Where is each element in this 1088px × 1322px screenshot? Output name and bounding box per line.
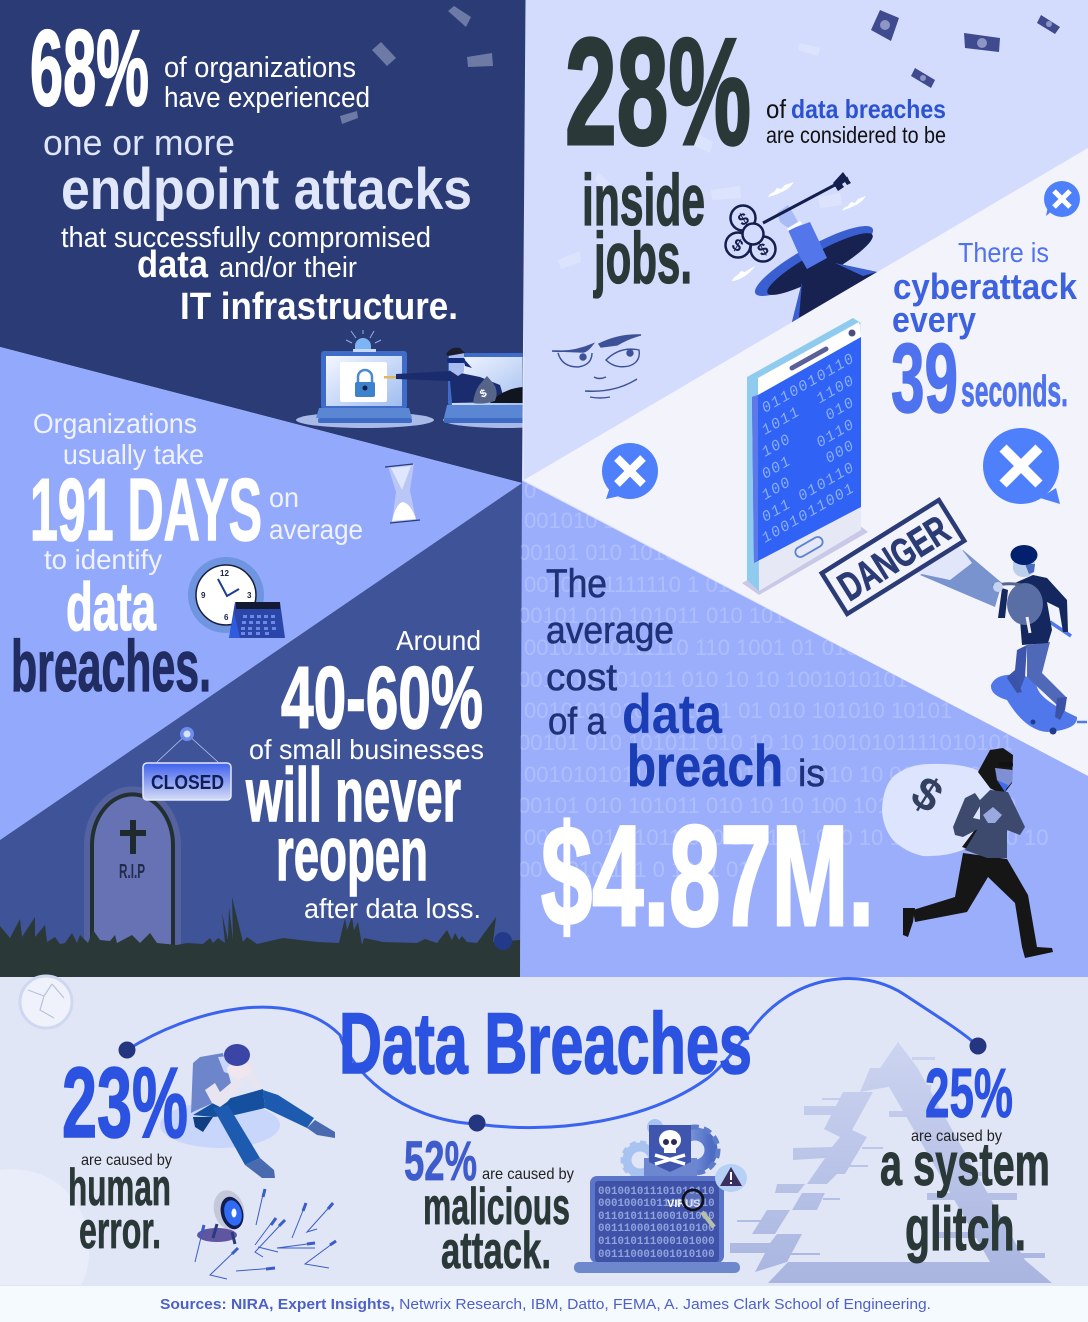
- panel: small businesses background: [0, 483, 522, 977]
- connector curve: [127, 978, 978, 1127]
- binary background pattern: 00101 010 1011 010 1001 01 010 10 10 10 10 010 10: [524, 825, 1048, 850]
- icon: virus laptop: 001110001001010100: [598, 1249, 715, 1261]
- icon: calendar: [229, 602, 285, 638]
- heading: attack: attack.: [441, 1222, 551, 1280]
- icon: virus laptop: 001001011101010110: [598, 1186, 715, 1198]
- binary background pattern: 001010101101 1001 01 010 1010 10 010 10101: [524, 762, 993, 787]
- footer: sources: Sources: NIRA, Expert Insights, Netwrix Research, IBM, Datto, FEMA, A. James Clark School of Engineering.: [160, 1296, 931, 1313]
- panel: top right background: [524, 0, 1088, 480]
- heading: data: data: [66, 569, 157, 645]
- stat: 52%: 52%: [404, 1129, 477, 1192]
- text: of organizations: of organizations: [164, 52, 356, 84]
- heading: error: error.: [79, 1202, 161, 1260]
- text: The: The: [546, 562, 607, 606]
- panel: average cost of a breach: [518, 478, 1053, 958]
- heading: Data Breaches: Data Breaches: [339, 996, 752, 1092]
- stat: $4.87M: $4.87M.: [541, 797, 874, 956]
- binary background pattern: 00101 010 101011 010 101 1010 10: [518, 603, 871, 628]
- heading: reopen: reopen: [276, 812, 428, 897]
- icon: hourglass: [385, 464, 420, 523]
- icon: target and arrows: [195, 1187, 336, 1279]
- text: one or more: one or more: [43, 122, 235, 163]
- icon: closed sign: [143, 727, 231, 800]
- icon: falling bills: [340, 6, 493, 124]
- icon: smartphone with binary: 1001011001: [759, 480, 858, 547]
- decorative: pale sphere: [0, 1169, 89, 1285]
- panel: causes of data breaches: [0, 976, 1052, 1285]
- icon: running thief with money bag: $: [903, 765, 952, 823]
- icon: thief on skateboard: [991, 545, 1087, 734]
- text: average: average: [269, 514, 363, 545]
- panel: small businesses: [0, 625, 520, 977]
- dot: [118, 1042, 136, 1058]
- stat: 39: 39: [891, 323, 958, 433]
- text: are caused by: are caused by: [81, 1152, 172, 1169]
- text: are caused by: are caused by: [482, 1166, 574, 1183]
- text: are considered to be: are considered to be: [766, 122, 946, 148]
- binary background pattern: [518, 478, 1048, 882]
- stat: 40-60%: 40-60%: [281, 648, 483, 747]
- icon: gravestone: R.I.P: [119, 861, 145, 883]
- icon: laptops with thief: $: [478, 387, 489, 401]
- icon: key in hole: [726, 172, 880, 322]
- icon: smartphone with binary: 011 010110: [759, 459, 858, 526]
- binary background pattern: 001 010 101011 010 10 10 1001010101: [518, 667, 908, 692]
- icon: key in hole: $: [754, 239, 772, 260]
- binary background pattern: 0010101010 10 1001 01 010 101010 10101: [524, 698, 952, 723]
- binary background pattern: 00101 010 101011 010 10 10 10010101111010101: [518, 730, 1013, 755]
- icon: closed sign: CLOSED: [151, 772, 224, 794]
- text: on: on: [269, 482, 299, 513]
- text: to identify: to identify: [44, 544, 162, 575]
- binary background pattern: 00101 010 101011 010 10 10: [518, 540, 804, 565]
- icon: skater thief beam: [917, 543, 1002, 607]
- icon: key in hole: $: [729, 235, 747, 256]
- icon: danger stamp: DANGER: [831, 508, 958, 610]
- icon: x bubble right: [983, 428, 1060, 504]
- icon: virus laptop: VIRUS: [667, 1198, 701, 1210]
- text: cost: cost: [546, 657, 617, 699]
- decorative: cracked sphere: [20, 976, 72, 1028]
- icon: sad person: [160, 1044, 335, 1178]
- icon: running thief with money bag: [882, 748, 1053, 958]
- icon: danger stamp: [822, 500, 964, 614]
- text: IT infrastructure: IT infrastructure.: [180, 286, 458, 328]
- panel: off-white diagonal background: [524, 148, 1088, 776]
- icon: clouds: [732, 182, 866, 281]
- text: have experienced: have experienced: [164, 82, 370, 114]
- icon: clock: 9: [201, 591, 206, 600]
- icon: blue dot: [494, 932, 512, 950]
- text: average: average: [546, 610, 674, 652]
- heading: endpoint attacks: endpoint attacks: [61, 157, 472, 222]
- panel: bottom causes background: [0, 977, 1088, 1286]
- heading: inside: inside: [582, 161, 705, 241]
- panel: inside jobs: [552, 7, 1060, 398]
- ground and grass: [0, 897, 520, 977]
- panel: endpoint attacks: [30, 6, 567, 428]
- heading: jobs: jobs.: [593, 219, 692, 299]
- dot: [970, 1038, 986, 1054]
- panel: sources footer background: [0, 1286, 1088, 1322]
- panel: lower right background: [520, 480, 1088, 977]
- text: of a: of a: [548, 701, 607, 743]
- icon: gravestone: [84, 786, 181, 947]
- binary background pattern: 00101010111110 110 1001 01 010 1: [524, 635, 877, 660]
- icon: virus laptop: 001110001001010100: [598, 1223, 715, 1235]
- panel: cyberattack every 39 seconds: [602, 181, 1087, 734]
- icon: falling bills: [871, 10, 1060, 88]
- heading: breach: breach: [627, 734, 783, 799]
- text: data: data: [137, 244, 209, 286]
- icon: smartphone with binary: 100 000: [759, 437, 858, 504]
- heading: every: every: [892, 299, 976, 340]
- icon: faint bills: [558, 43, 842, 269]
- text: that successfully compromised: that successfully compromised: [61, 222, 431, 254]
- icon: clock: 6: [224, 613, 229, 622]
- heading: malicious: malicious: [423, 1178, 570, 1236]
- heading: human: human: [68, 1159, 171, 1217]
- icon: virus laptop: 011010111000101000: [598, 1211, 715, 1223]
- icon: key in hole: $: [735, 209, 753, 230]
- panel: days to identify background: [0, 347, 522, 840]
- icon: smartphone with binary: [742, 318, 868, 595]
- text: of: of: [766, 94, 787, 124]
- text: Organizations: Organizations: [33, 408, 197, 439]
- binary background pattern: 001010 1111110 1 0101 1: [524, 572, 773, 597]
- heading: glitch: glitch.: [905, 1195, 1026, 1264]
- heading: will never: will never: [245, 753, 461, 838]
- icon: x bubble small: [1044, 181, 1080, 217]
- panel: days to identify: [11, 408, 420, 707]
- heading: data: data: [622, 682, 723, 745]
- text: are caused by: are caused by: [911, 1128, 1002, 1145]
- icon: virus laptop: 000100010111010110: [598, 1198, 715, 1210]
- panel: endpoint attacks background: [0, 0, 526, 483]
- text: is: is: [798, 753, 825, 795]
- text: after data loss: after data loss.: [304, 893, 481, 924]
- icon: virus laptop: [574, 1119, 747, 1273]
- binary background pattern: 0: [524, 478, 536, 503]
- heading: cyberattack: cyberattack: [893, 266, 1078, 307]
- decorative: glitch triangle: [730, 1042, 1052, 1283]
- stat: 25%: 25%: [925, 1054, 1013, 1132]
- stat: 28%: 28%: [565, 7, 751, 177]
- icon: virus laptop: 011010111000101000: [598, 1236, 715, 1248]
- heading: breaches: breaches.: [11, 627, 211, 707]
- binary background pattern: 00 1 010 101 0 1001 01: [518, 857, 750, 882]
- binary background pattern: 001010 10 1011 010 101: [524, 508, 767, 533]
- text: usually take: usually take: [63, 439, 204, 470]
- icon: x bubble left: [602, 443, 658, 499]
- icon: clock: [188, 557, 264, 633]
- icon: clock: 3: [247, 591, 252, 600]
- icon: smartphone with binary: 001 0110: [759, 416, 858, 483]
- binary background pattern: 00101 010 101011 010 10 10 100 1010 10 1100 10: [518, 793, 1016, 818]
- icon: clock: 12: [220, 569, 229, 578]
- text: data breaches: data breaches: [791, 94, 946, 124]
- icon: smartphone with binary: 0110010110: [759, 350, 858, 417]
- stat: 23%: 23%: [62, 1047, 188, 1159]
- stat: 191 DAYS: 191 DAYS: [30, 460, 262, 559]
- text: and/or their: and/or their: [219, 252, 357, 284]
- icon: laptops with thief: [296, 330, 522, 428]
- icon: smartphone with binary: 1011 1100: [759, 372, 858, 439]
- dot: [468, 1114, 486, 1132]
- text: Around: Around: [396, 625, 481, 656]
- text: There is: There is: [958, 237, 1049, 268]
- icon: sly face: [552, 335, 641, 398]
- text: of small businesses: of small businesses: [249, 734, 484, 765]
- icon: smartphone with binary: 100 010: [759, 394, 858, 461]
- stat: 68%: 68%: [30, 7, 149, 128]
